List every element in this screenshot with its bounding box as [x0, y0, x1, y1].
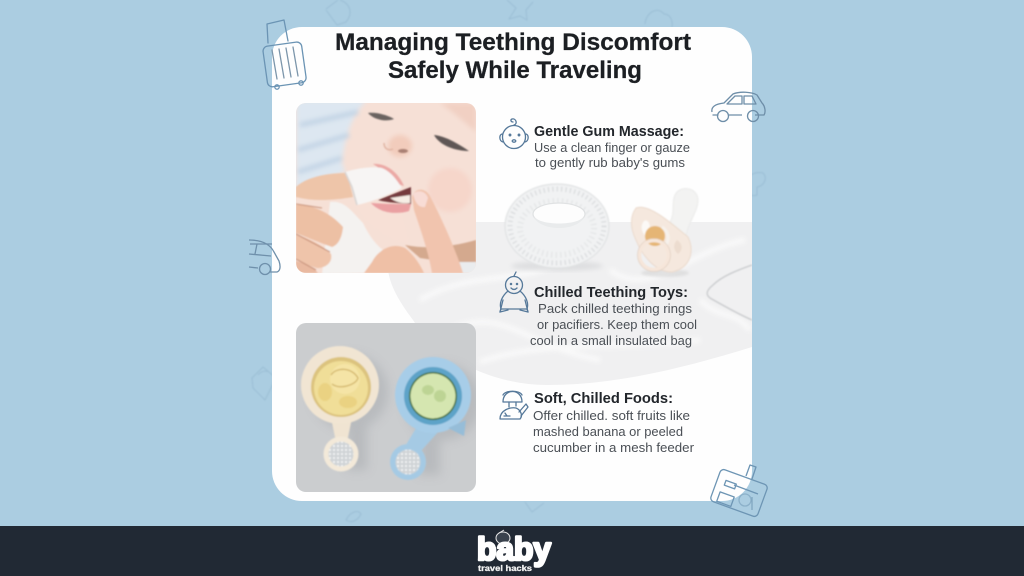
icon: car left: [249, 240, 280, 274]
icon: baby face: [500, 119, 528, 148]
teeth: [390, 195, 410, 203]
heading: gentle gum massage: to gently rub baby's gums: [535, 155, 686, 170]
upper lip: [373, 164, 404, 186]
heading: chilled teething toys: or pacifiers. Keep them cool: [537, 317, 697, 332]
white card: [272, 27, 752, 501]
nostril: [398, 149, 408, 153]
onesie: [322, 202, 383, 273]
index finger: [296, 173, 353, 200]
icon: food feeder: [500, 391, 528, 419]
heading: gentle gum massage: Gentle Gum Massage:: [534, 124, 684, 140]
marble background panel: [388, 222, 752, 385]
heading: soft chilled foods: cucumber in a mesh feeder: [533, 440, 695, 455]
heading: gentle gum massage: Use a clean finger or gauze: [534, 140, 690, 155]
right finger: [412, 190, 463, 273]
lower knuckles: [364, 246, 424, 273]
logo: baby head: [496, 530, 510, 544]
title: Managing Teething Discomfort: [335, 29, 691, 56]
mouth opening: [378, 187, 411, 204]
logo: travel hacks: [478, 564, 533, 573]
lower fingers: [296, 205, 343, 247]
nail: [413, 191, 428, 207]
pacifier: [632, 189, 698, 277]
blue feeder: [390, 357, 471, 480]
heading: soft chilled foods: [533, 391, 695, 455]
heading: chilled teething toys: Chilled Teething Toys:: [534, 285, 688, 301]
photo: finger gauze gum massage: [296, 100, 476, 274]
heading: chilled teething toys: [530, 285, 697, 348]
icon: suitcase: [262, 20, 307, 89]
gauze: [345, 167, 402, 205]
faint background icons: [252, 0, 765, 522]
icon: luggage tag: [710, 465, 768, 518]
heading: gentle gum massage: [534, 124, 690, 170]
neck shadow: [405, 240, 476, 263]
heading: soft chilled foods: Soft, Chilled Foods:: [534, 391, 673, 407]
heading: soft chilled foods: Offer chilled. soft fruits like: [533, 408, 690, 423]
right eye: [434, 135, 469, 151]
lower lip: [371, 203, 411, 213]
heading: chilled teething toys: cool in a small insulated bag: [530, 333, 692, 348]
title: [335, 29, 691, 84]
heading: soft chilled foods: mashed banana or peeled: [533, 424, 683, 439]
icon: seated baby: [500, 272, 528, 312]
photo: mesh feeders with banana and cucumber: [296, 323, 481, 492]
footer bar: [0, 526, 1024, 576]
title: Safely While Traveling: [388, 57, 642, 84]
teething ring: [505, 184, 609, 271]
heading: chilled teething toys: Pack chilled teething rings: [538, 301, 693, 316]
beige feeder: [301, 346, 379, 472]
icon: car top right: [712, 92, 765, 122]
left eye: [368, 113, 394, 120]
logo: baby: [477, 531, 551, 567]
